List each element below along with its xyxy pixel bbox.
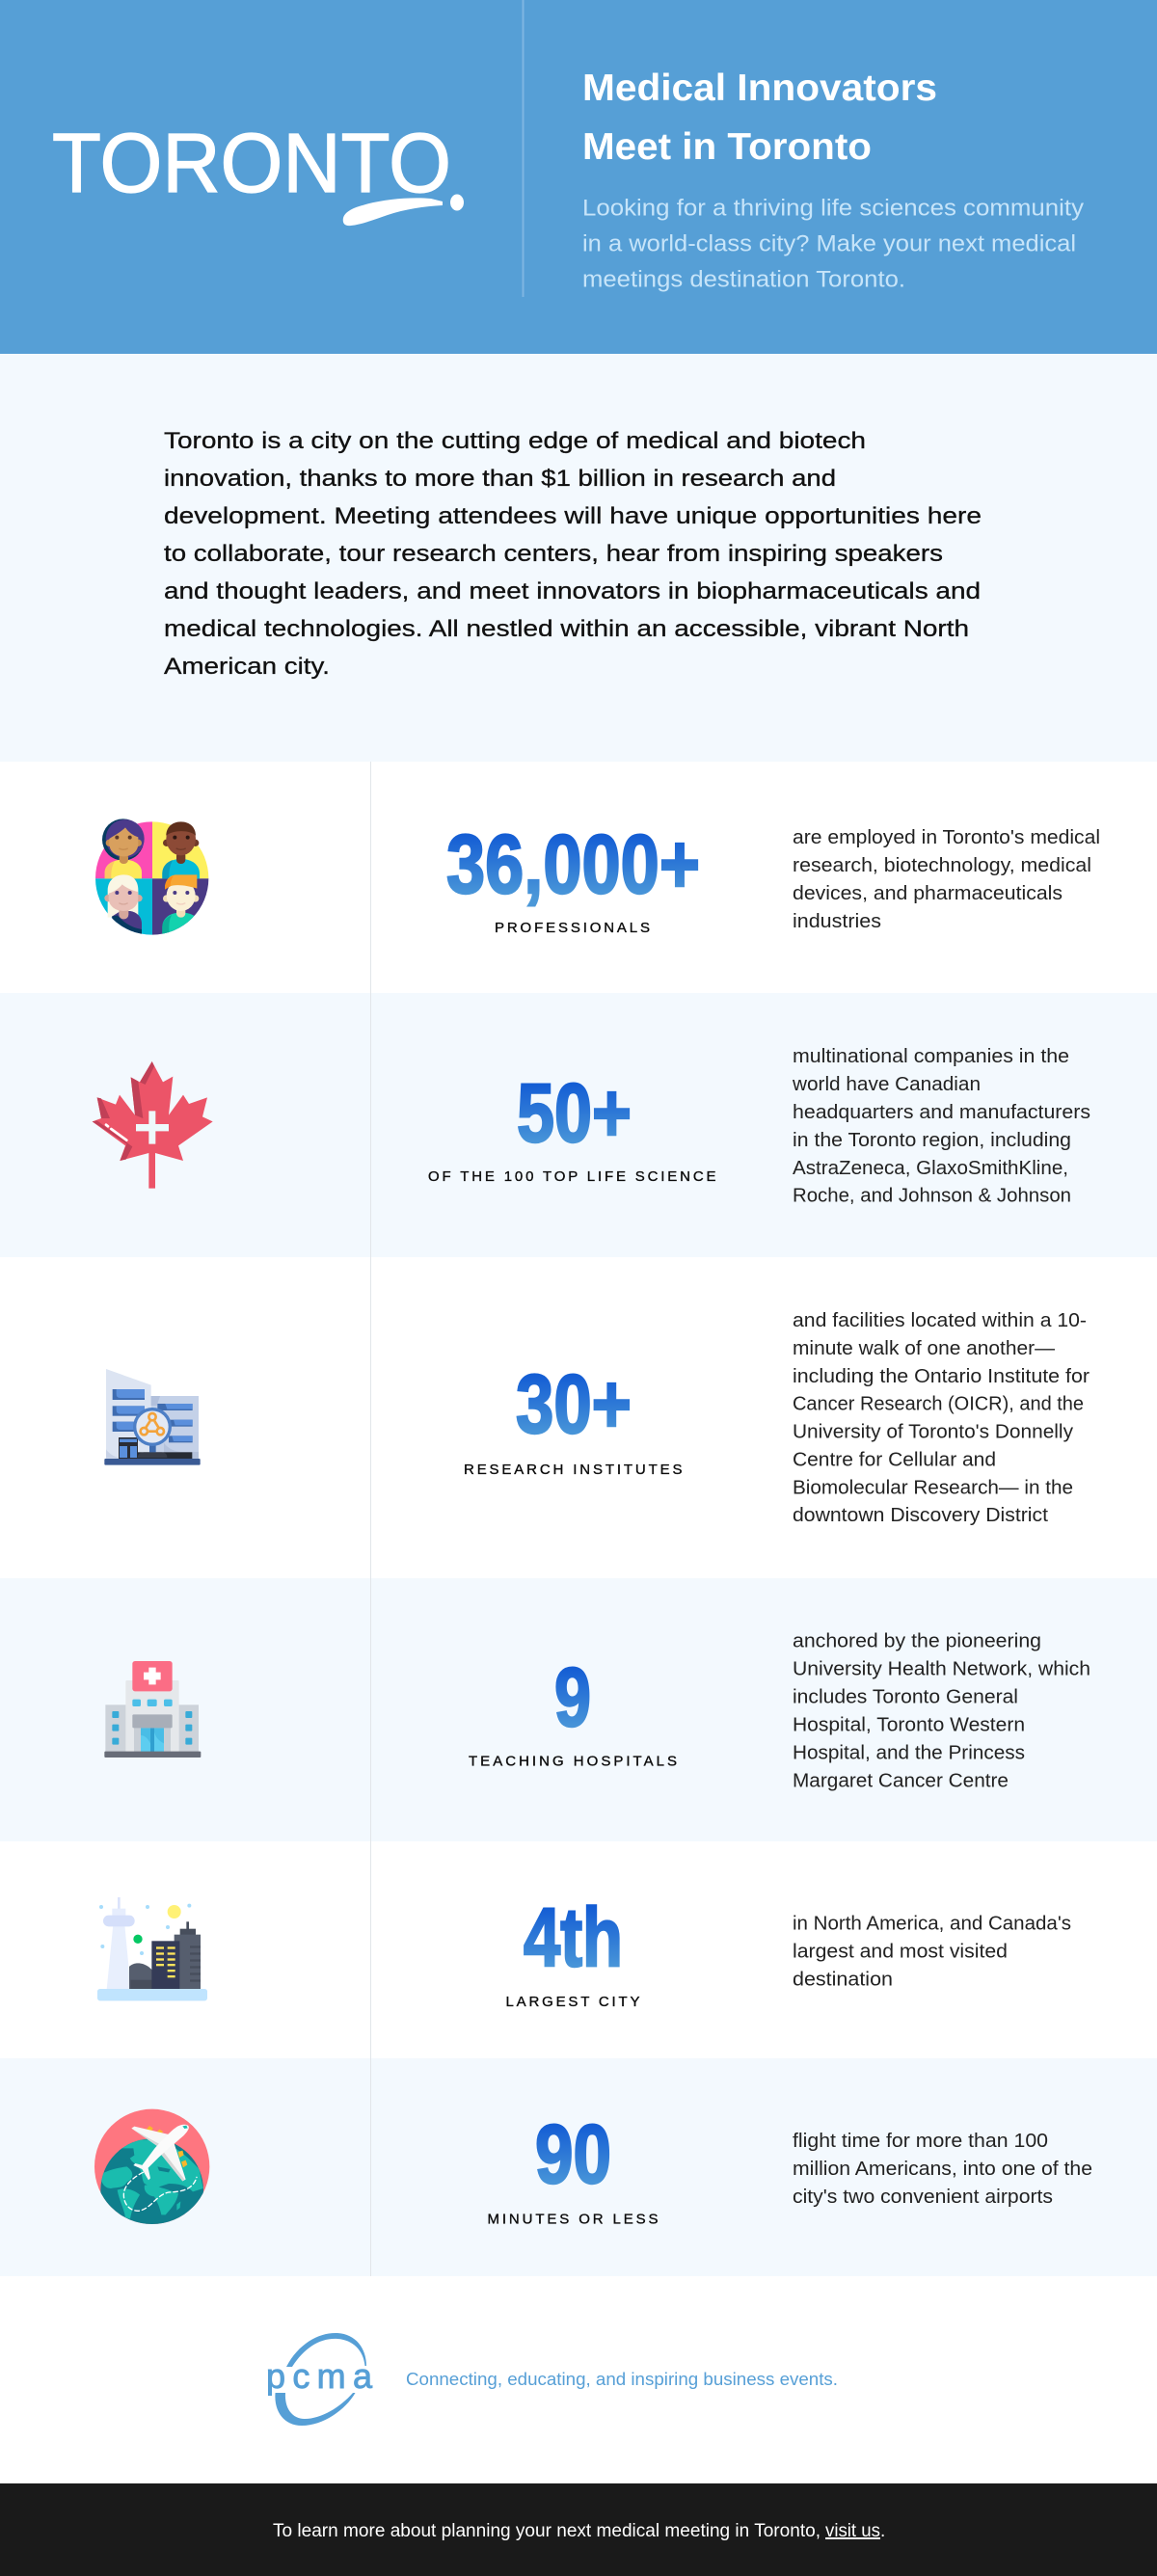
intro text: American city. bbox=[164, 654, 330, 680]
description: Biomolecular Research— in the bbox=[793, 1477, 1073, 1498]
header panel bbox=[0, 0, 1157, 354]
description: and facilities located within a 10- bbox=[793, 1310, 1087, 1331]
stat: 50+: OF THE 100 TOP LIFE SCIENCE bbox=[428, 1168, 715, 1185]
stat: 9: TEACHING HOSPITALS bbox=[469, 1753, 677, 1770]
stat: 50+ bbox=[428, 1067, 715, 1185]
panel: professionals row bbox=[90, 818, 1100, 938]
description: million Americans, into one of the bbox=[793, 2159, 1092, 2180]
panel: flight time row bbox=[94, 2109, 1091, 2224]
panel: intro bbox=[0, 354, 1157, 762]
stat: 4th bbox=[505, 1892, 640, 2010]
intro text: innovation, thanks to more than $1 billion in research and bbox=[164, 466, 836, 492]
description: world have Canadian bbox=[792, 1074, 981, 1095]
icon: maple leaf bbox=[93, 1061, 213, 1189]
panel: teaching hospitals row bbox=[104, 1631, 1090, 1791]
description: largest and most visited bbox=[793, 1942, 1008, 1963]
stat: 9 bbox=[469, 1651, 677, 1770]
description: Centre for Cellular and bbox=[793, 1450, 996, 1471]
stat: 30+ bbox=[464, 1358, 683, 1478]
row backgrounds bbox=[0, 762, 1157, 2483]
description: flight time for more than 100 bbox=[793, 2131, 1048, 2152]
description: University Health Network, which bbox=[793, 1658, 1090, 1679]
stat: 36,000+ professionals: 36,000+ bbox=[446, 818, 700, 911]
PCMA logo bbox=[266, 2333, 373, 2426]
description bbox=[793, 1913, 1071, 1990]
stat: 4th: LARGEST CITY bbox=[505, 1994, 640, 2010]
description: anchored by the pioneering bbox=[793, 1631, 1041, 1652]
panel: top life science row bbox=[93, 1046, 1090, 1207]
description bbox=[793, 2131, 1092, 2208]
description: Margaret Cancer Centre bbox=[793, 1770, 1009, 1791]
description: in North America, and Canada's bbox=[793, 1913, 1071, 1934]
footer text: visit us bbox=[825, 2521, 880, 2541]
stat: 4th: 4th bbox=[524, 1892, 623, 1984]
stat: 30+: 30+ bbox=[516, 1358, 632, 1451]
description: includes Toronto General bbox=[793, 1687, 1018, 1708]
stat: 30+: RESEARCH INSTITUTES bbox=[464, 1462, 683, 1478]
intro text: and thought leaders, and meet innovators in biopharmaceuticals and bbox=[164, 578, 981, 604]
subtitle: Looking for a thriving life sciences community bbox=[582, 195, 1084, 222]
description: including the Ontario Institute for bbox=[793, 1366, 1090, 1387]
footer text: To learn more about planning your next medical meeting in Toronto, bbox=[273, 2521, 821, 2541]
description: research, biotechnology, medical bbox=[793, 855, 1091, 876]
icon: hospital bbox=[104, 1661, 201, 1758]
subtitle bbox=[582, 195, 1084, 293]
intro text: to collaborate, tour research centers, hear from inspiring speakers bbox=[164, 541, 943, 567]
panel: PCMA bbox=[266, 2333, 838, 2426]
description: minute walk of one another— bbox=[793, 1338, 1055, 1359]
tagline: Connecting, educating, and inspiring business events. bbox=[406, 2370, 838, 2389]
description: AstraZeneca, GlaxoSmithKline, bbox=[793, 1158, 1068, 1179]
intro text: Toronto is a city on the cutting edge of medical and biotech bbox=[164, 428, 866, 454]
PCMA logo: pcma bbox=[266, 2356, 373, 2396]
description bbox=[792, 1046, 1090, 1207]
description: multinational companies in the bbox=[793, 1046, 1069, 1067]
description: city's two convenient airports bbox=[793, 2187, 1053, 2208]
stat: 50+: 50+ bbox=[517, 1067, 632, 1160]
subtitle: in a world-class city? Make your next medical bbox=[582, 231, 1076, 256]
panel: largest city row bbox=[97, 1892, 1071, 2010]
description: University of Toronto's Donnelly bbox=[793, 1421, 1073, 1442]
stat: 90: 90 bbox=[535, 2108, 611, 2201]
footer bbox=[0, 2483, 1157, 2576]
stat: 90: MINUTES OR LESS bbox=[488, 2212, 658, 2227]
stat: 36,000+ professionals: PROFESSIONALS bbox=[495, 920, 650, 936]
description: headquarters and manufacturers bbox=[793, 1102, 1090, 1123]
title bbox=[582, 67, 937, 168]
description bbox=[793, 1310, 1090, 1526]
description: devices, and pharmaceuticals bbox=[793, 883, 1063, 904]
icon: plane and globe bbox=[94, 2109, 210, 2224]
description: destination bbox=[793, 1969, 893, 1990]
title: Meet in Toronto bbox=[582, 126, 872, 168]
description: in the Toronto region, including bbox=[793, 1130, 1071, 1151]
description: Hospital, and the Princess bbox=[793, 1743, 1025, 1764]
stat: 36,000+ professionals bbox=[446, 818, 700, 936]
footer text: . bbox=[880, 2521, 885, 2541]
intro text: medical technologies. All nestled within an accessible, vibrant North bbox=[164, 616, 969, 642]
icon: research building bbox=[104, 1369, 201, 1465]
intro text: development. Meeting attendees will have unique opportunities here bbox=[164, 503, 982, 529]
description: industries bbox=[793, 911, 881, 932]
stat: 90 bbox=[488, 2108, 658, 2227]
description bbox=[793, 827, 1100, 932]
icon: Toronto skyline bbox=[97, 1897, 207, 2000]
description: are employed in Toronto's medical bbox=[793, 827, 1100, 848]
description bbox=[793, 1631, 1090, 1791]
Toronto logo: TORONTO bbox=[52, 117, 451, 210]
description: Hospital, Toronto Western bbox=[793, 1714, 1025, 1735]
title: Medical Innovators bbox=[582, 67, 937, 109]
icon: people bbox=[95, 818, 208, 935]
stat: 9: 9 bbox=[554, 1651, 591, 1744]
description: Cancer Research (OICR), and the bbox=[793, 1394, 1084, 1415]
description: downtown Discovery District bbox=[793, 1505, 1048, 1526]
intro text bbox=[164, 428, 982, 680]
description: Roche, and Johnson & Johnson bbox=[793, 1186, 1071, 1207]
subtitle: meetings destination Toronto. bbox=[582, 266, 905, 293]
panel: research institutes row bbox=[104, 1310, 1090, 1526]
